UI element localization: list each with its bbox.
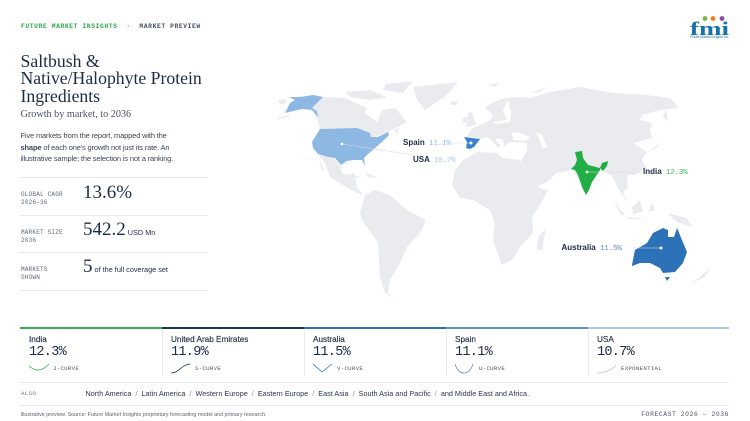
- curve label: EXPONENTIAL: [621, 365, 662, 372]
- card name: Australia: [313, 335, 345, 344]
- card: Spain: [446, 327, 588, 376]
- stat label: [21, 229, 63, 244]
- stat: market size: [20, 215, 208, 244]
- stat value: 5 of the full coverage set: [83, 256, 168, 277]
- curve label: U-CURVE: [479, 365, 505, 372]
- card: India: [20, 327, 162, 372]
- j-curve icon: [29, 364, 50, 370]
- card: Australia: [304, 327, 446, 376]
- card rate: 11.5%: [313, 344, 350, 360]
- curve label: S-CURVE: [195, 365, 221, 372]
- card rate: 12.3%: [29, 344, 66, 360]
- stat label: 2026-36: [21, 199, 48, 206]
- card rate: 10.7%: [597, 344, 634, 360]
- intro text: Five markets from the report, mapped with the: [20, 131, 167, 140]
- header kicker: FUTURE MARKET INSIGHTS · MARKET PREVIEW: [21, 23, 201, 30]
- card rate: 11.9%: [171, 344, 208, 360]
- card: USA: [588, 327, 729, 376]
- intro text: illustrative sample; the selection is not a ranking.: [20, 154, 173, 163]
- marker dots: [341, 142, 662, 250]
- leader lines: [277, 115, 661, 248]
- stat value: 13.6%: [83, 182, 132, 202]
- title: Saltbush &: [20, 51, 100, 71]
- stat label: [21, 266, 48, 281]
- logo wordmark: fmi: [690, 18, 729, 39]
- card name: United Arab Emirates: [171, 335, 248, 344]
- subtitle: Growth by market, to 2036: [20, 109, 131, 120]
- source note: Illustrative preview. Source: Future Market Insights proprietary forecasting model and primary research.: [20, 412, 266, 418]
- logo dots: [702, 16, 724, 21]
- country: India: [571, 151, 608, 195]
- country: USA: [285, 95, 389, 166]
- country: Spain: [464, 137, 480, 149]
- stat: markets shown: [20, 252, 208, 291]
- stat label: MARKETS: [21, 266, 48, 273]
- land masses: [278, 81, 710, 299]
- v-curve icon: [313, 364, 332, 372]
- title: Native/Halophyte Protein: [20, 68, 202, 88]
- map label: India: India 12.3%: [643, 167, 687, 177]
- exponential curve icon: [597, 364, 616, 374]
- logo tagline: Future Market Insights Inc.: [690, 34, 729, 38]
- other regions list: North America / Latin America / Western Europe / Eastern Europe / East Asia / South Asia and Pacific / and Middle East and Africa.: [86, 389, 529, 398]
- stat: global CAGR: [20, 177, 208, 206]
- stat label: SHOWN: [21, 274, 40, 281]
- title: [20, 51, 202, 106]
- card name: Spain: [455, 335, 476, 344]
- s-curve icon: [171, 364, 190, 374]
- map label: USA: USA 10.7%: [413, 155, 455, 165]
- stat label: MARKET SIZE: [21, 229, 63, 236]
- intro text: shape of each one's growth not just its rate. An: [20, 143, 169, 152]
- map label: Australia: Australia 11.5%: [562, 243, 622, 253]
- card name: USA: [597, 335, 614, 344]
- map label: Spain: Spain 11.1%: [403, 138, 451, 148]
- inland seas: [492, 100, 547, 148]
- curve label: J-CURVE: [53, 365, 79, 372]
- stat label: 2036: [21, 237, 36, 244]
- forecast label: FORECAST 2026 – 2036: [641, 411, 729, 418]
- u-curve icon: [455, 364, 474, 374]
- logo: fmi: [690, 16, 729, 39]
- curve label: V-CURVE: [337, 365, 363, 372]
- card rate: 11.1%: [455, 344, 492, 360]
- stat label: [21, 191, 63, 206]
- card: United Arab Emirates: [162, 327, 304, 376]
- country: Australia: [632, 228, 687, 273]
- stat value: 542.2 USD Mn: [83, 219, 155, 240]
- also label: ALSO: [21, 390, 36, 397]
- card name: India: [29, 335, 47, 344]
- stat label: GLOBAL CAGR: [21, 191, 63, 198]
- title: Ingredients: [20, 86, 100, 106]
- intro text: [20, 131, 173, 163]
